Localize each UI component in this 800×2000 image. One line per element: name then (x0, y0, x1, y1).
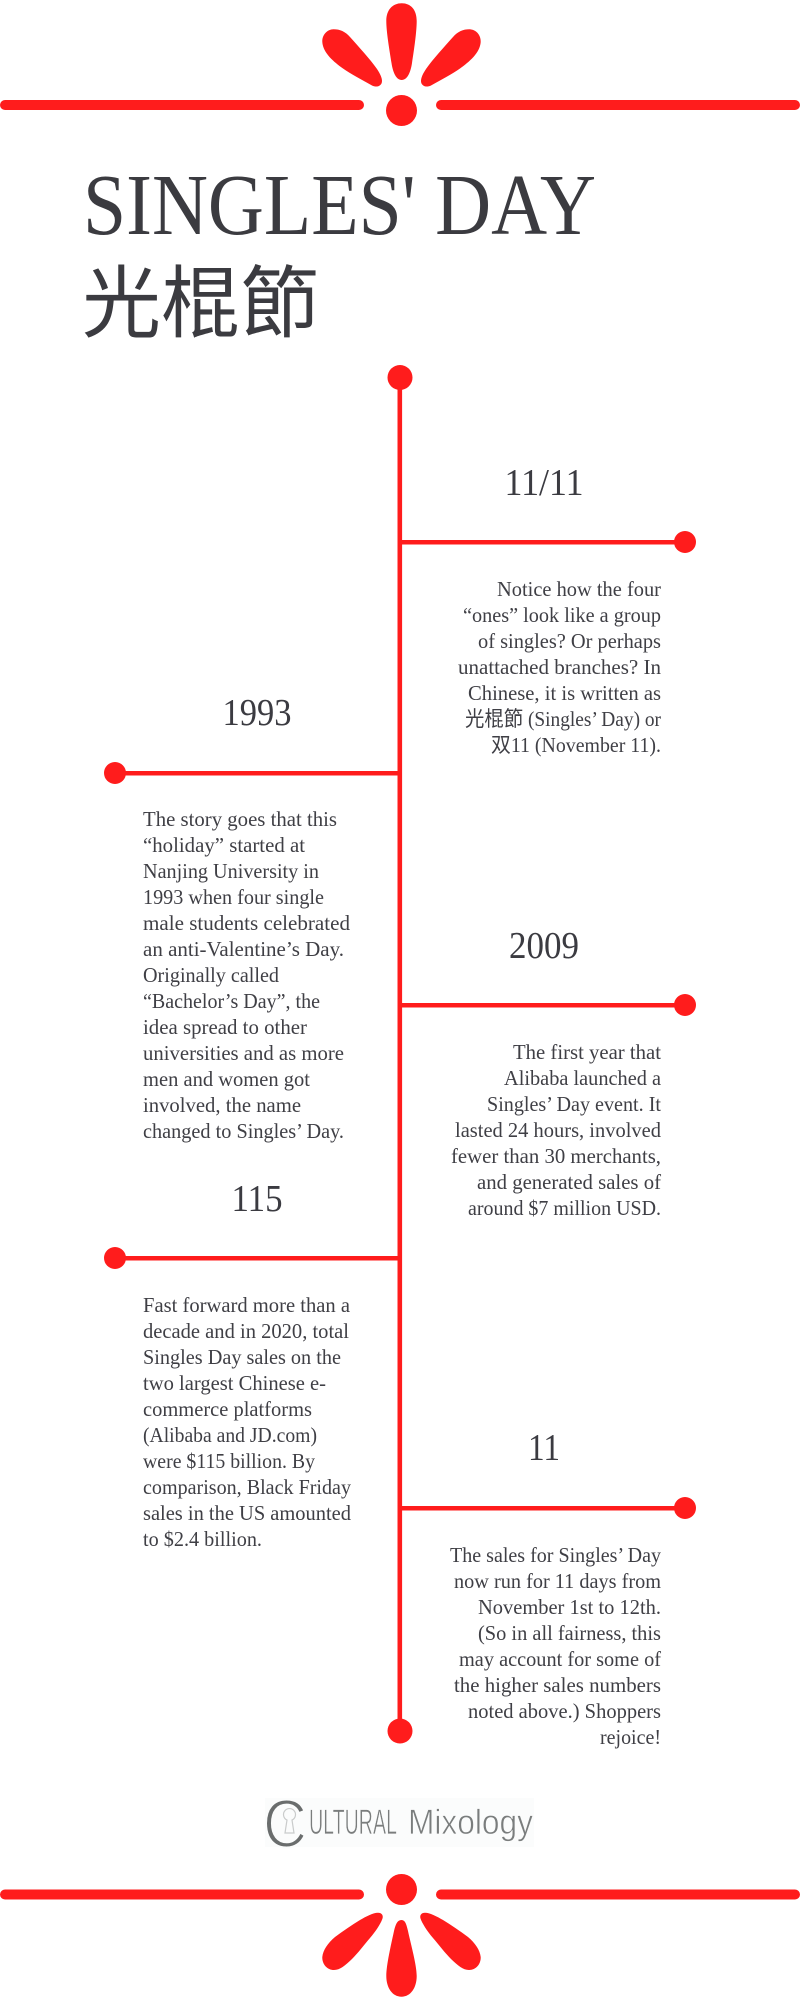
top ornament (0, 3, 800, 126)
body: 11: The sales for Singles’ Day (450, 1543, 661, 1567)
body: 11/11: “ones” look like a group (463, 603, 661, 627)
panel: 11/11 (400, 462, 696, 757)
body: 1993: The story goes that this (143, 807, 337, 831)
body: 115: decade and in 2020, total (143, 1319, 349, 1343)
body: 11: may account for some of (459, 1647, 661, 1671)
body: 2009: lasted 24 hours, involved (455, 1118, 661, 1142)
panel: 2009 (400, 925, 696, 1220)
body: 1993: idea spread to other (143, 1015, 307, 1039)
body: 2009: Singles’ Day event. It (487, 1092, 661, 1116)
body: 115: Singles Day sales on the (143, 1345, 341, 1369)
body: 2009 (451, 1040, 662, 1220)
body: 115: sales in the US amounted (143, 1501, 351, 1525)
connector: 115 (104, 1247, 400, 1269)
body: 1993: male students celebrated (143, 911, 350, 935)
heading: 115: 115 (232, 1178, 282, 1220)
connector: 1993 (104, 762, 400, 784)
body: 2009: and generated sales of (477, 1170, 661, 1194)
panel: 115 (104, 1178, 400, 1551)
body: 11/11: Notice how the four (497, 577, 661, 601)
body: 2009: fewer than 30 merchants, (451, 1144, 661, 1168)
body: 11: noted above.) Shoppers (468, 1699, 661, 1723)
icon: keyhole (284, 1809, 295, 1833)
logo: Cultural Mixology: Mixology (408, 1803, 533, 1842)
connector: 2009 (400, 994, 696, 1016)
body: 115: two largest Chinese e- (143, 1371, 326, 1395)
timeline spine (388, 365, 412, 1744)
body: 11/11: 双11 (November 11). (491, 733, 661, 757)
body: 115: to $2.4 billion. (143, 1527, 262, 1551)
body: 115: commerce platforms (143, 1397, 312, 1421)
body: 115: comparison, Black Friday (143, 1475, 351, 1499)
title (82, 156, 596, 348)
body: 115: were $115 billion. By (143, 1449, 315, 1473)
body: 2009: around $7 million USD. (468, 1196, 661, 1220)
title: chinese: 光棍節 (82, 259, 319, 348)
body: 11: the higher sales numbers (454, 1673, 661, 1697)
body: 1993: “holiday” started at (143, 833, 305, 857)
logo: Cultural Mixology: ULTURAL (309, 1803, 397, 1842)
body: 11: now run for 11 days from (454, 1569, 661, 1593)
body: 11/11: unattached branches? In (458, 655, 661, 679)
body: 115: Fast forward more than a (143, 1293, 351, 1317)
body: 115 (143, 1293, 351, 1551)
connector: 11/11 (400, 531, 696, 553)
body: 11/11: 光棍節 (Singles’ Day) or (465, 707, 661, 731)
panel: 11 (400, 1427, 696, 1749)
body: 2009: The first year that (513, 1040, 661, 1064)
logo: Cultural Mixology (263, 1786, 534, 1862)
body: 1993: men and women got (143, 1067, 310, 1091)
body: 11/11: of singles? Or perhaps (478, 629, 661, 653)
body: 1993: 1993 when four single (143, 885, 324, 909)
body: 1993: an anti-Valentine’s Day. (143, 937, 344, 961)
connector: 11 (400, 1497, 696, 1519)
body: 1993: Originally called (143, 963, 279, 987)
body: 115: (Alibaba and JD.com) (143, 1423, 317, 1447)
heading: 2009: 2009 (509, 925, 579, 967)
body: 1993 (143, 807, 350, 1143)
body: 1993: changed to Singles’ Day. (143, 1119, 344, 1143)
heading: 11/11: 11/11 (504, 462, 584, 504)
panel: 1993 (104, 692, 400, 1143)
bottom ornament (0, 1874, 800, 1997)
body: 11/11: Chinese, it is written as (468, 681, 661, 705)
heading: 1993: 1993 (222, 692, 292, 734)
body: 1993: Nanjing University in (143, 859, 319, 883)
heading: 11: 11 (528, 1427, 560, 1469)
body: 1993: “Bachelor’s Day”, the (143, 989, 320, 1013)
title: english: SINGLES' DAY (83, 156, 596, 253)
logo: Cultural Mixology: C (263, 1786, 307, 1862)
body: 11: November 1st to 12th. (478, 1595, 661, 1619)
body: 2009: Alibaba launched a (504, 1066, 662, 1090)
body: 11: (So in all fairness, this (478, 1621, 661, 1645)
body: 1993: involved, the name (143, 1093, 301, 1117)
body: 1993: universities and as more (143, 1041, 344, 1065)
body: 11/11 (458, 577, 661, 757)
body: 11: rejoice! (600, 1725, 661, 1749)
body: 11 (450, 1543, 661, 1749)
